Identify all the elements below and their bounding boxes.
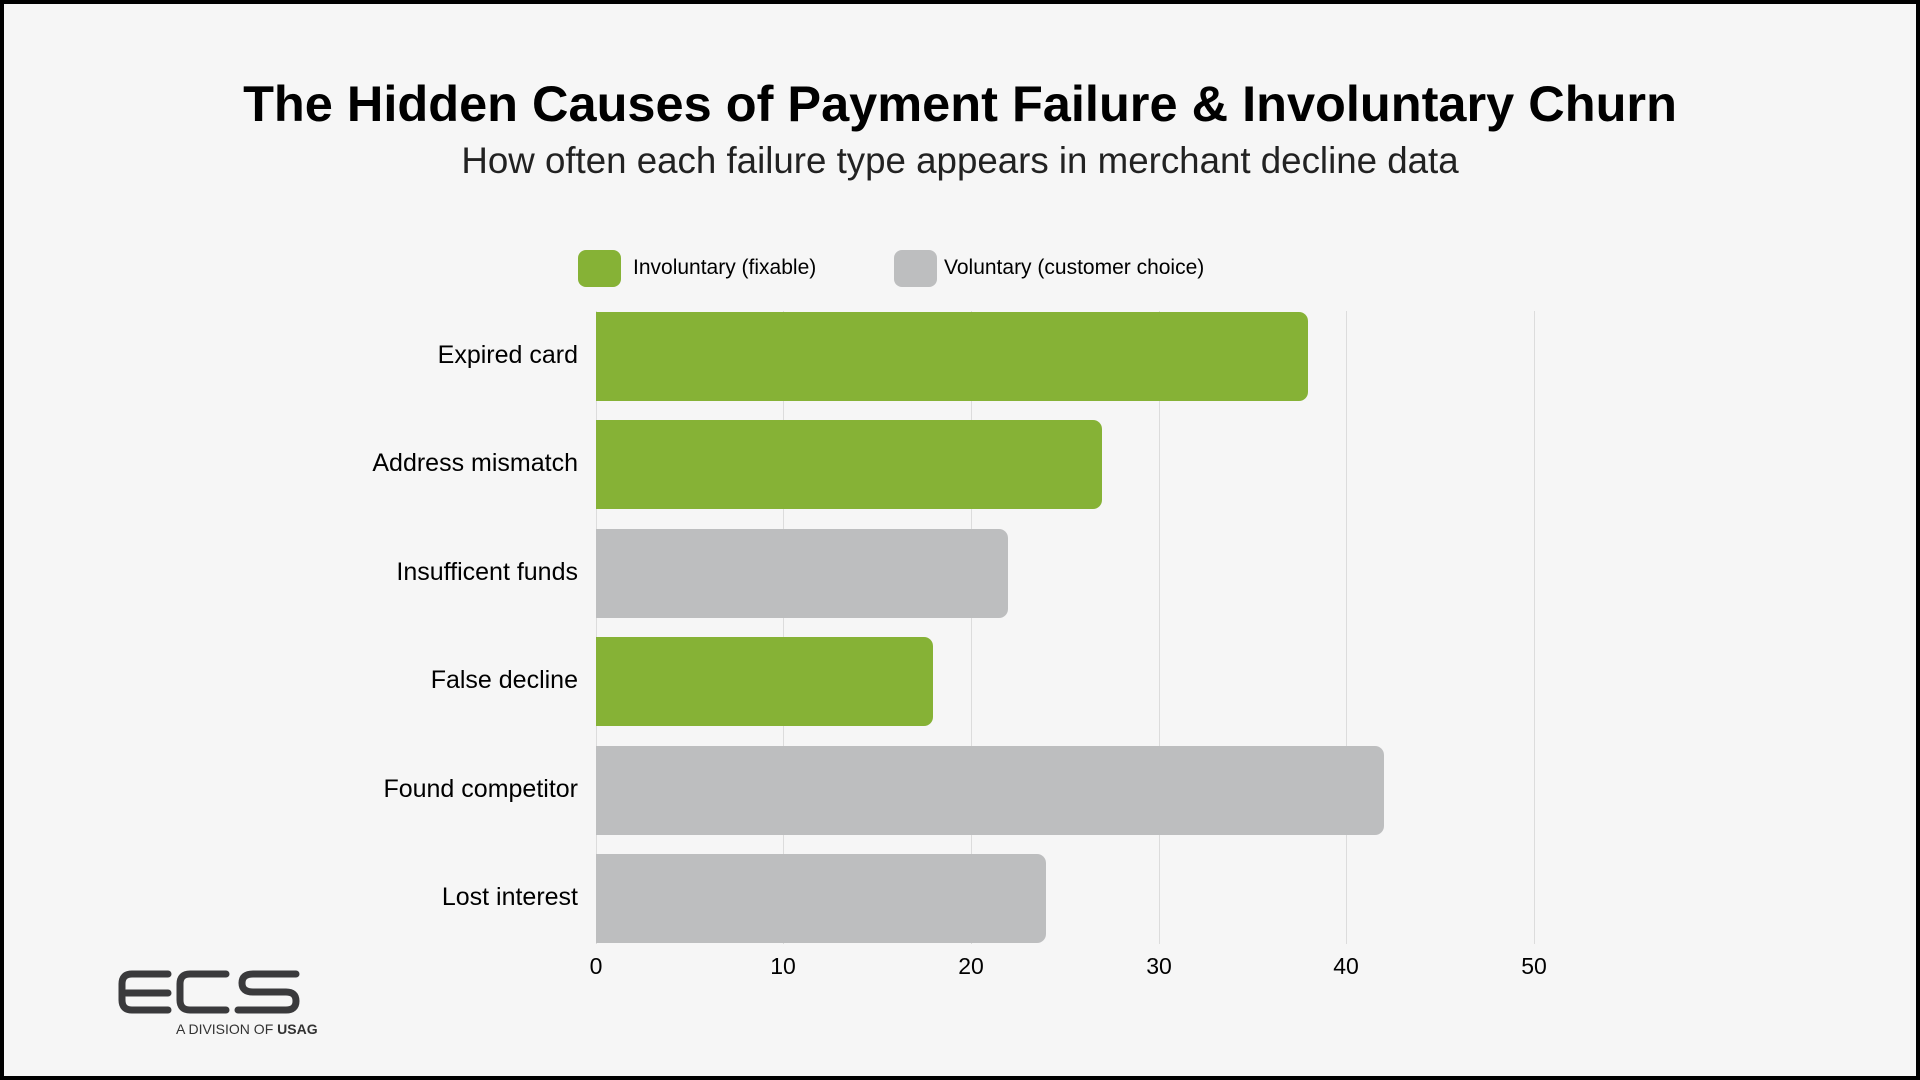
subtitle: How often each failure type appears in merchant decline data [461,140,1459,181]
bar: expired card [596,312,1308,401]
legend: involuntary: Involuntary (fixable) [633,256,816,279]
x axis ticks: 10 [770,953,796,979]
x axis ticks: 50 [1521,953,1547,979]
title: The Hidden Causes of Payment Failure & Involuntary Churn [243,75,1677,132]
category labels [372,341,578,911]
bar: address mismatch [596,420,1102,509]
category labels: Insufficent funds [396,558,578,586]
bar: lost interest [596,854,1046,943]
x axis ticks: 0 [590,953,602,979]
x axis ticks: 30 [1146,953,1172,979]
logo [118,970,318,1037]
bar chart [372,311,1547,979]
legend: voluntary [894,250,1204,287]
x axis ticks [590,953,1547,979]
bar: found competitor [596,746,1384,835]
x axis ticks: 20 [958,953,984,979]
category labels: Found competitor [383,775,578,803]
logo: A DIVISION OF USAG [176,1021,318,1037]
legend: voluntary: Voluntary (customer choice) [944,256,1204,279]
legend [578,250,1204,287]
category labels: Address mismatch [372,449,578,477]
category labels: Expired card [438,341,578,369]
legend: involuntary [578,250,816,287]
category labels: Lost interest [442,883,578,911]
category labels: False decline [431,666,578,694]
x axis ticks: 40 [1333,953,1359,979]
bar: false decline [596,637,933,726]
bar: insufficient funds [596,529,1008,618]
